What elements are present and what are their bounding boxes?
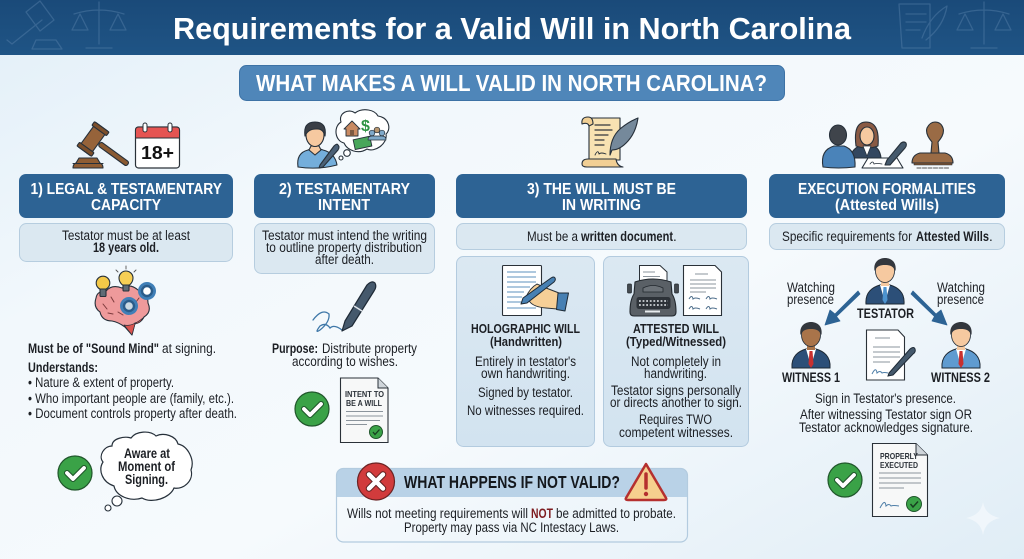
specific requirements box: Specific requirements for — [782, 229, 912, 244]
written document box: . — [673, 229, 677, 244]
attested will text: Requires TWO — [639, 412, 712, 427]
heading — [769, 174, 1005, 218]
icon: witness 2 — [942, 322, 980, 368]
heading: EXECUTION FORMALITIES — [798, 181, 976, 198]
heading — [456, 174, 747, 218]
signing rule text — [799, 391, 973, 435]
icon: faint scroll and quill — [899, 4, 947, 48]
heading — [254, 174, 435, 218]
age requirement box: Testator must be at least — [62, 228, 190, 243]
heading: 1) LEGAL & TESTAMENTARY — [30, 181, 222, 198]
panel: execution formalities — [769, 174, 1005, 516]
callout: aware at moment of signing: Moment of — [118, 459, 175, 474]
intent description box: after death. — [315, 252, 374, 267]
diagram: testator and witnesses — [782, 258, 990, 385]
subheading bar: WHAT MAKES A WILL VALID IN NORTH CAROLINA? — [256, 70, 767, 96]
panel: legal and testamentary capacity — [19, 174, 237, 511]
arrow: testator to witness 2 — [911, 291, 947, 325]
icon: green check — [295, 392, 329, 426]
specific requirements box: . — [989, 229, 993, 244]
decorative star — [966, 502, 1000, 535]
heading: CAPACITY — [91, 197, 161, 214]
card: holographic will — [456, 256, 594, 446]
callout: aware at moment of signing — [101, 432, 192, 511]
attested will text: competent witnesses. — [619, 425, 733, 440]
panel: the will must be in writing — [456, 174, 748, 446]
title: Requirements for a Valid Will in North Carolina — [173, 11, 852, 46]
text: watching presence right: Watching — [937, 280, 985, 295]
heading: 3) THE WILL MUST BE — [527, 181, 676, 198]
purpose text: according to wishes. — [292, 354, 398, 369]
attested will text: ATTESTED WILL — [633, 322, 719, 336]
text: watching presence right — [937, 280, 985, 307]
icon: red X — [358, 463, 394, 500]
text: witness 1 label: WITNESS 1 — [782, 370, 840, 385]
icon: properly executed document — [872, 444, 928, 516]
icon: properly executed document: EXECUTED — [880, 460, 918, 470]
consequence text — [347, 506, 676, 535]
specific requirements box — [770, 224, 1004, 250]
holographic will text: own handwriting. — [481, 366, 570, 381]
heading: 2) TESTAMENTARY — [279, 181, 410, 198]
purpose text — [272, 341, 417, 369]
text: witness 2 label: WITNESS 2 — [931, 370, 990, 385]
icon: witness 1 — [792, 322, 830, 368]
signing rule text: After witnessing Testator sign OR — [800, 407, 972, 422]
holographic will text — [467, 322, 584, 418]
holographic will text: No witnesses required. — [467, 403, 584, 418]
icon: properly executed document: PROPERLY — [880, 451, 918, 461]
heading: WHAT HAPPENS IF NOT VALID? — [404, 472, 620, 492]
header banner — [0, 0, 1024, 55]
holographic will text: HOLOGRAPHIC WILL — [471, 322, 580, 336]
icon: calendar 18+ — [136, 123, 180, 168]
icon: hand writing on paper — [502, 266, 568, 316]
sound mind text — [28, 341, 237, 421]
intent description box: to outline property distribution — [266, 240, 422, 255]
sound mind text: • Nature & extent of property. — [28, 375, 174, 390]
intent description box — [254, 224, 434, 274]
subheading bar — [240, 66, 784, 100]
sound mind text: • Who important people are (family, etc.). — [28, 391, 234, 406]
consequence text: Wills not meeting requirements will — [347, 506, 528, 521]
written document box — [456, 224, 746, 250]
arrow: testator to witness 1 — [825, 291, 860, 325]
consequence text: NOT — [531, 506, 554, 521]
intent description box: Testator must intend the writing — [262, 228, 427, 243]
specific requirements box: Attested Wills — [916, 229, 989, 244]
text: testator label: TESTATOR — [857, 306, 914, 321]
text: watching presence left: Watching — [787, 280, 835, 295]
text: watching presence left — [787, 280, 835, 307]
icon: calendar 18+: 18+ — [141, 143, 174, 163]
callout: aware at moment of signing: Aware at — [124, 446, 170, 461]
written document box: written document — [580, 229, 673, 244]
sound mind text: • Document controls property after death. — [28, 406, 237, 421]
purpose text: Purpose: — [272, 341, 318, 356]
holographic will text: Signed by testator. — [478, 385, 573, 400]
icon: faint scales left — [72, 2, 126, 48]
text: watching presence right: presence — [937, 292, 984, 307]
icon: intent to be a will document: BE A WILL — [346, 398, 382, 408]
icon: person imagining property — [298, 110, 389, 168]
attested will text: (Typed/Witnessed) — [626, 335, 726, 349]
icon: scroll and quill — [582, 117, 638, 167]
sound mind text: Must be of "Sound Mind" — [28, 341, 159, 356]
callout: aware at moment of signing: Signing. — [125, 472, 168, 487]
heading: (Attested Wills) — [835, 197, 939, 214]
sound mind text: at signing. — [162, 341, 216, 356]
attested will text: or directs another to sign. — [610, 395, 742, 410]
holographic will text: (Handwritten) — [490, 335, 562, 349]
signing rule text: Sign in Testator's presence. — [815, 391, 956, 406]
icon: warning triangle — [626, 464, 666, 500]
heading: INTENT — [318, 197, 370, 214]
icon: gavel — [73, 122, 137, 176]
attested will text — [610, 322, 742, 440]
icon: pen with squiggle signature — [313, 282, 376, 331]
sound mind text: Understands: — [28, 360, 98, 375]
icon: signed paper — [684, 266, 722, 316]
purpose text: Distribute property — [322, 341, 417, 356]
text: watching presence left: presence — [787, 292, 834, 307]
panel: testamentary intent — [254, 174, 435, 442]
heading — [19, 174, 233, 218]
consequence text: be admitted to probate. — [556, 506, 676, 521]
icon: faint gavel — [7, 1, 62, 49]
icon: typewriter — [628, 266, 678, 316]
icon: person imagining property: $ — [361, 118, 370, 135]
card: attested will — [604, 256, 748, 446]
icon: intent to be a will document — [340, 378, 388, 442]
attested will text: Not completely in — [631, 354, 721, 369]
written document box: Must be a — [527, 229, 578, 244]
age requirement box — [20, 224, 232, 262]
consequence text: Property may pass via NC Intestacy Laws. — [404, 520, 619, 535]
holographic will text: Entirely in testator's — [475, 354, 576, 369]
attested will text: handwriting. — [644, 366, 707, 381]
icon: faint scales right — [957, 2, 1011, 48]
heading: IN WRITING — [562, 197, 641, 214]
icon: intent to be a will document: INTENT TO — [345, 389, 384, 399]
attested will text: Testator signs personally — [611, 383, 741, 398]
icon: green check — [58, 456, 92, 490]
icon: brain with bulbs and gears — [95, 266, 154, 335]
icon: people signing with stamp — [822, 122, 953, 168]
icon: green check — [828, 463, 862, 497]
age requirement box: 18 years old. — [93, 240, 159, 255]
icon: testator — [866, 258, 904, 304]
icon: signed document with pen — [866, 330, 915, 380]
signing rule text: Testator acknowledges signature. — [799, 420, 973, 435]
panel: what happens if not valid — [336, 463, 688, 542]
